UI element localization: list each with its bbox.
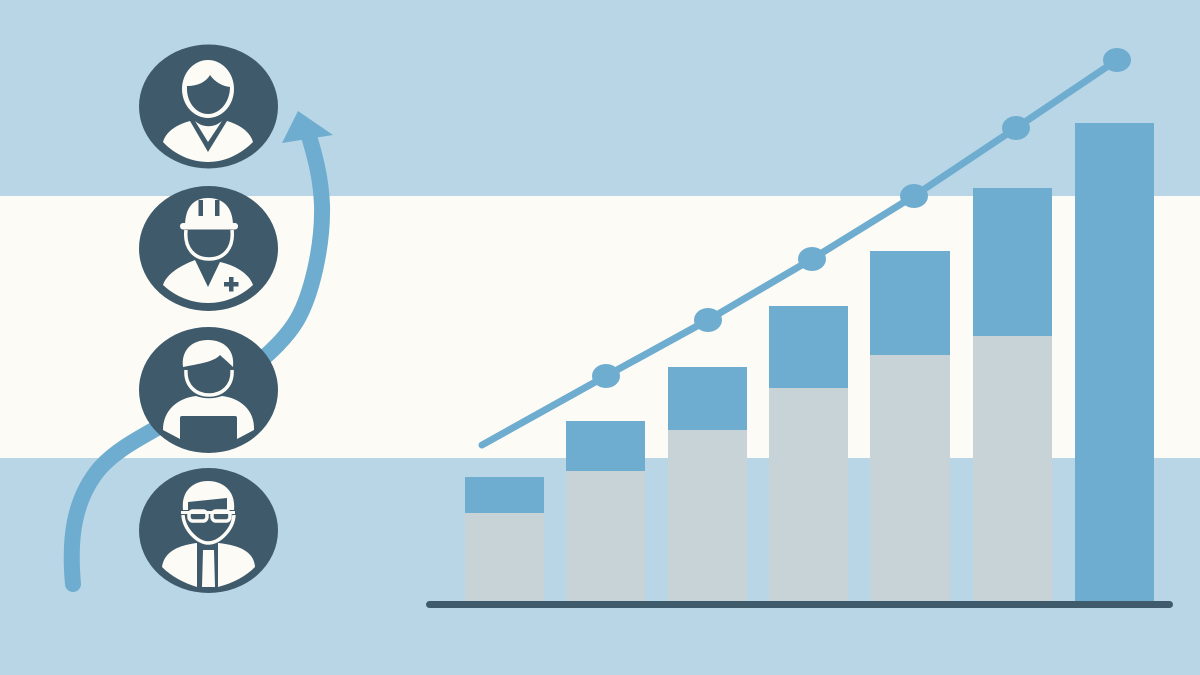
bar 5 — [870, 251, 950, 601]
icon: manager person — [139, 44, 278, 168]
bar 4 — [769, 306, 848, 601]
bar 3 — [668, 367, 747, 601]
trend line with markers — [482, 48, 1131, 445]
curved career arrow — [72, 111, 333, 584]
icon: person with laptop — [139, 327, 278, 453]
icon: businessman with glasses — [139, 468, 278, 593]
bar 7 — [1075, 123, 1154, 601]
stacked bar chart — [465, 123, 1154, 601]
chart baseline — [426, 601, 1173, 608]
icon: construction worker — [139, 186, 278, 311]
bar 1 — [465, 477, 544, 601]
bar 6 — [973, 188, 1052, 601]
bar 2 — [566, 421, 645, 601]
